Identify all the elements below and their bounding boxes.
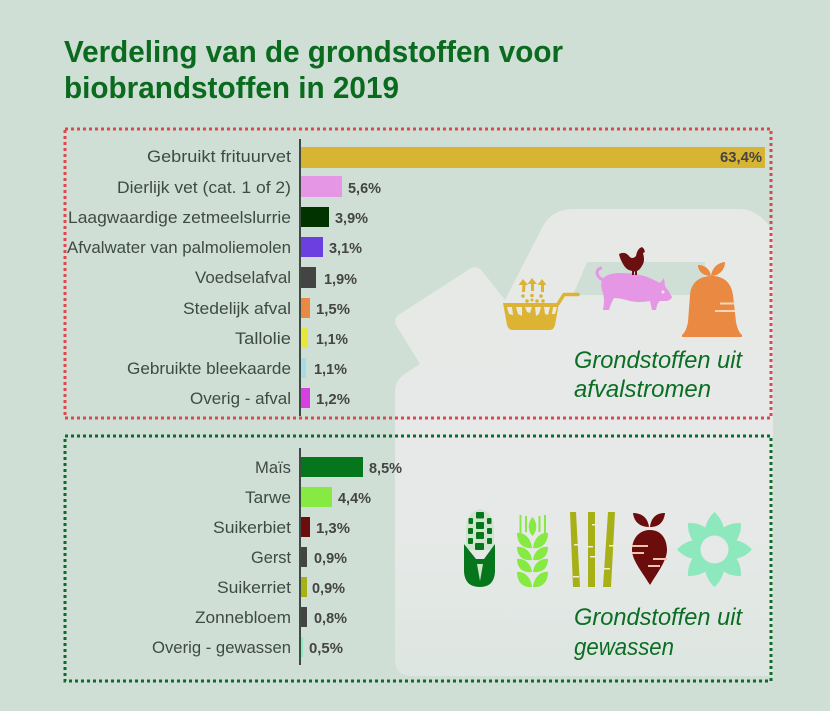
title: [64, 34, 563, 105]
bar chart: gewassen: 8,5%: [369, 461, 402, 477]
bar chart: gewassen: 1,3%: [316, 521, 350, 537]
icon: sunflower: [677, 512, 752, 587]
bar chart: afval: 3,9%: [335, 211, 368, 227]
bar chart: afval: Overig - afval: [190, 390, 291, 408]
panel: grondstoffen uit afvalstromen: [65, 129, 771, 418]
background jerrycan silhouette: [395, 209, 773, 676]
icon: chicken: [619, 247, 645, 275]
heading: grondstoffen uit afvalstromen: afvalstromen: [574, 376, 711, 403]
bar chart: afval: Voedselafval: [195, 269, 291, 287]
bar chart: gewassen: [152, 448, 402, 665]
bar chart: gewassen: 0,5%: [309, 641, 343, 657]
bar chart: gewassen: Suikerbiet: [213, 519, 291, 537]
bar chart: gewassen: 0,8%: [314, 611, 347, 627]
bar chart: afval: Tallolie: [235, 330, 291, 348]
bar chart: afval: Laagwaardige zetmeelslurrie: [68, 209, 291, 227]
bar chart: gewassen: Suikerriet: [217, 579, 291, 597]
icon: pig: [597, 268, 672, 310]
icon: corn: [464, 509, 495, 587]
heading: grondstoffen uit afvalstromen: [574, 347, 743, 403]
bar chart: afval: 63,4%: [720, 150, 762, 166]
heading: grondstoffen uit gewassen: Grondstoffen uit: [574, 604, 743, 631]
icon: sugar beet: [632, 513, 667, 585]
icon: sugar cane: [570, 512, 615, 587]
title: Verdeling van de grondstoffen voor: [64, 34, 563, 69]
title: biobrandstoffen in 2019: [64, 70, 399, 105]
panel: grondstoffen uit gewassen: [65, 436, 771, 681]
green dotted frame: [65, 436, 771, 681]
bar chart: afval: 1,1%: [316, 332, 348, 348]
red dotted frame: [65, 129, 771, 418]
heading: grondstoffen uit afvalstromen: Grondstoffen uit: [574, 347, 743, 374]
bar chart: afval: 5,6%: [348, 181, 381, 197]
bar chart: afval: Afvalwater van palmoliemolen: [67, 239, 291, 257]
bar chart: gewassen: 4,4%: [338, 491, 371, 507]
icon: frying basket: [503, 278, 578, 330]
bar chart: gewassen: Gerst: [251, 549, 291, 567]
bar chart: afval: [67, 139, 765, 416]
bar chart: afval: 1,1%: [314, 362, 347, 378]
bar chart: gewassen: 0,9%: [314, 551, 347, 567]
bar chart: afval: Gebruikt frituurvet: [147, 148, 291, 166]
bar chart: afval: Stedelijk afval: [183, 300, 291, 318]
icon: waste bag: [682, 262, 742, 337]
bar chart: gewassen: Tarwe: [245, 489, 291, 507]
bar chart: afval: Dierlijk vet (cat. 1 of 2): [117, 179, 291, 197]
bar chart: afval: 3,1%: [329, 241, 362, 257]
bar chart: afval: 1,9%: [324, 272, 357, 288]
bar chart: gewassen: Zonnebloem: [195, 609, 291, 627]
bar chart: gewassen: Maïs: [255, 459, 291, 477]
bar chart: gewassen: Overig - gewassen: [152, 639, 291, 657]
heading: grondstoffen uit gewassen: [574, 604, 743, 661]
bar chart: afval: 1,2%: [316, 392, 350, 408]
icon: wheat: [517, 515, 548, 587]
bar chart: afval: 1,5%: [316, 302, 350, 318]
heading: grondstoffen uit gewassen: gewassen: [574, 634, 674, 661]
bar chart: afval: Gebruikte bleekaarde: [127, 360, 291, 378]
bar chart: gewassen: 0,9%: [312, 581, 345, 597]
